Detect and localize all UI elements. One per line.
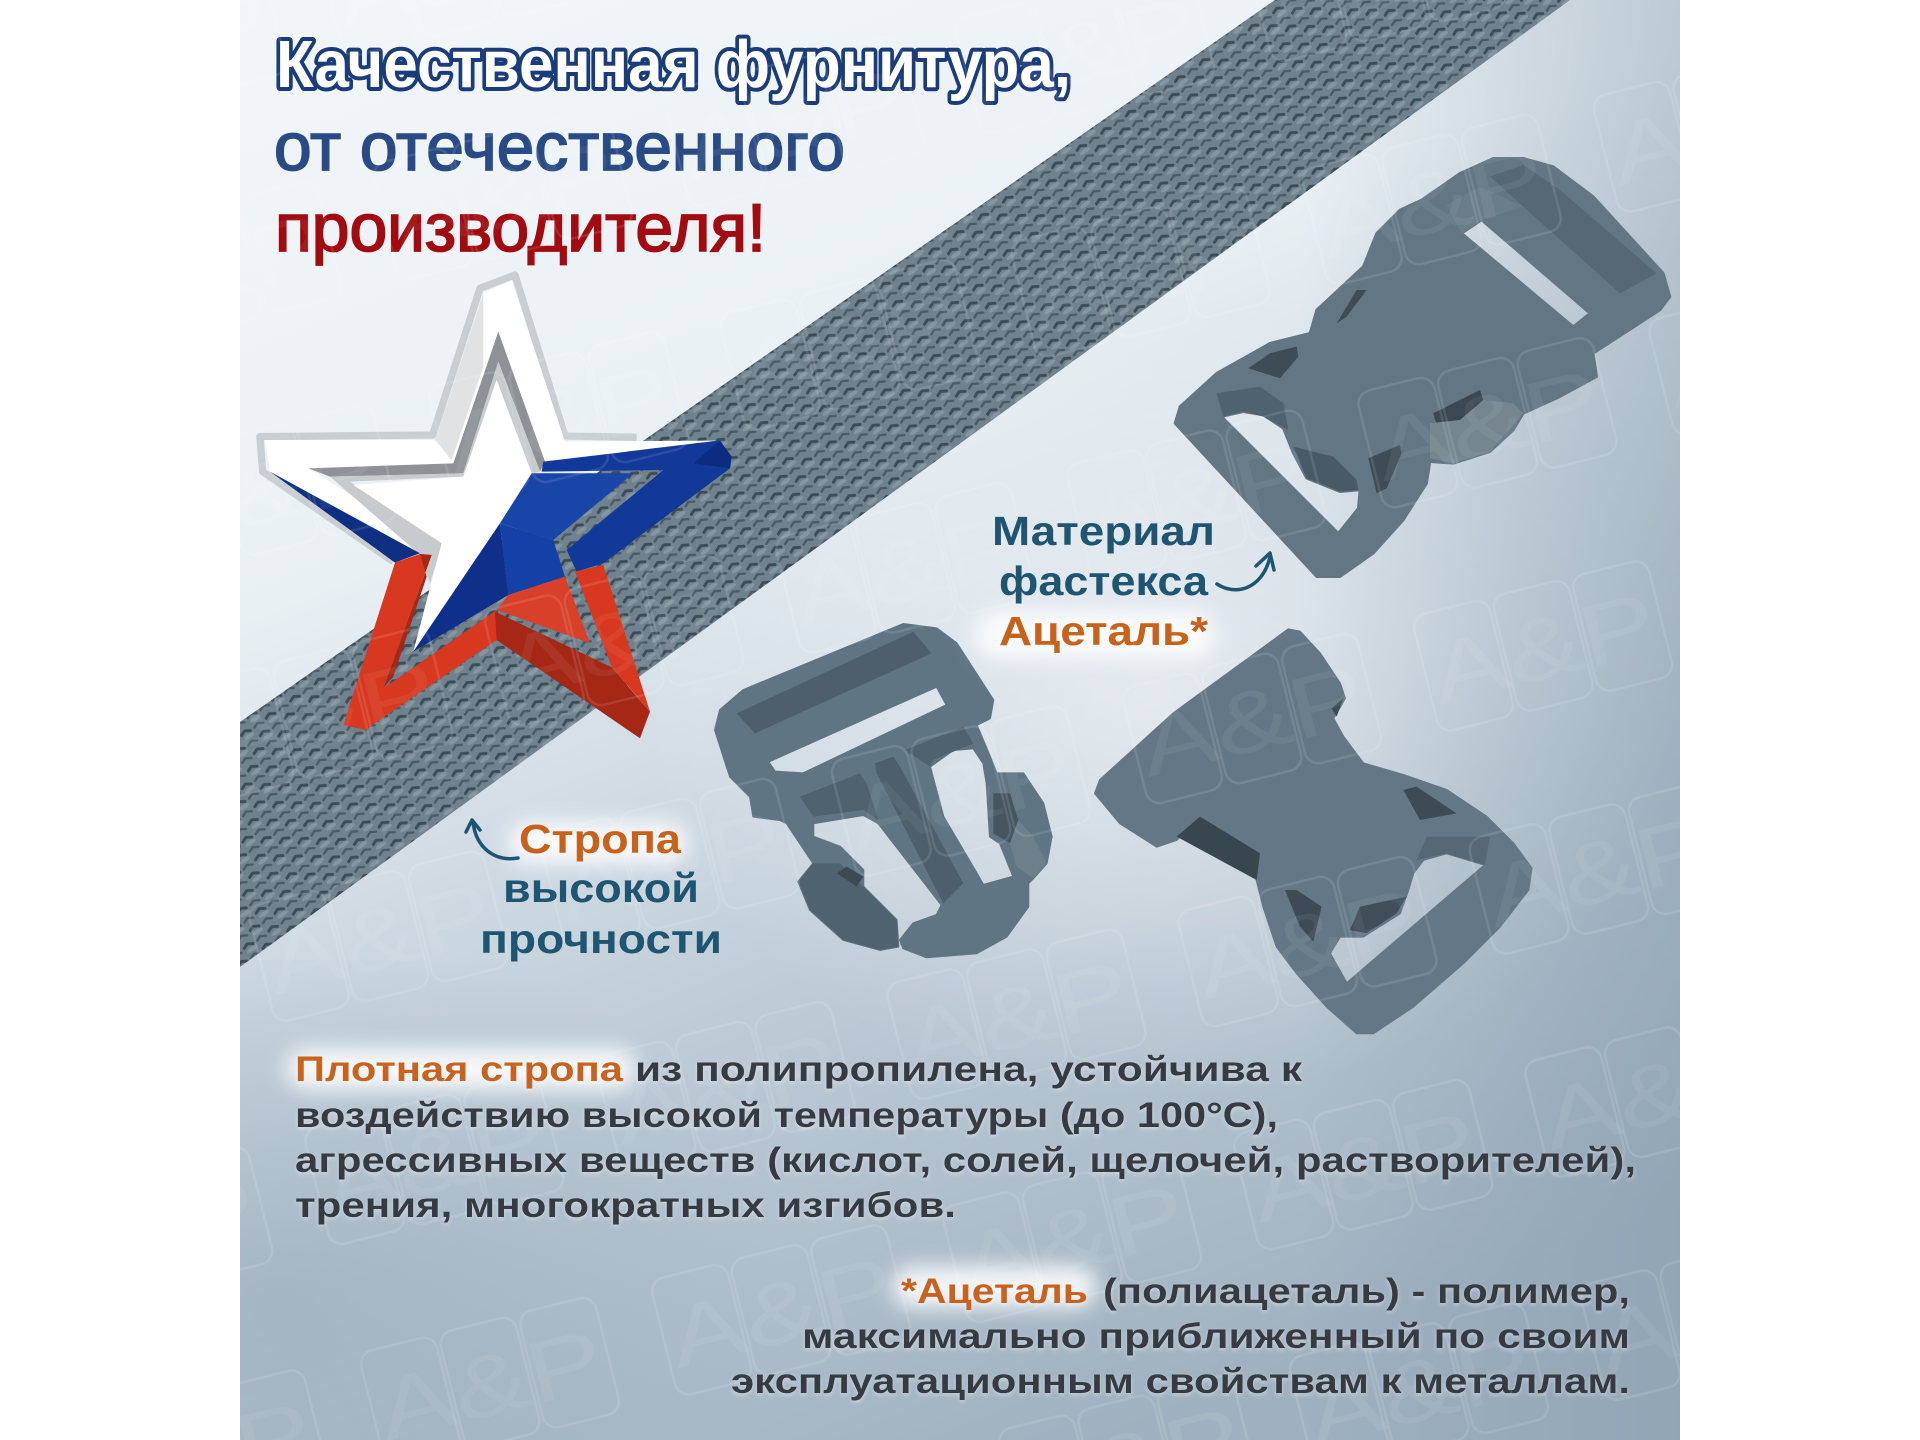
label line: high: высокой bbox=[503, 865, 699, 911]
arrow: to fastex bbox=[1217, 553, 1274, 590]
title line 2: от отечественного bbox=[274, 109, 845, 185]
label line: acetal: Ацеталь* bbox=[999, 608, 1208, 654]
icon: tricolour star bbox=[260, 275, 732, 738]
strap line 3: агрессивных веществ (кислот, солей, щелочей, растворителей), bbox=[295, 1141, 1636, 1180]
label: strap strength bbox=[480, 816, 722, 962]
strap line 1: из полипропилена, устойчива к bbox=[635, 1050, 1303, 1089]
footnote line 2: максимально приближенный по своим bbox=[802, 1317, 1630, 1356]
title bbox=[274, 27, 1071, 266]
background panel bbox=[240, 0, 1680, 1440]
label line: strength: прочности bbox=[480, 916, 722, 962]
strap line 4: трения, многократных изгибов. bbox=[295, 1186, 956, 1225]
footnote line 3: эксплуатационным свойствам к металлам. bbox=[731, 1362, 1630, 1401]
watermark layer bbox=[240, 0, 1680, 1440]
footnote line 1: (полиацеталь) - полимер, bbox=[1103, 1272, 1630, 1311]
strap line 2: воздействию высокой температуры (до 100°C), bbox=[295, 1096, 1278, 1135]
label line: material: Материал bbox=[992, 508, 1215, 554]
label line: strap: Стропа bbox=[519, 816, 682, 862]
label: fastex material bbox=[992, 508, 1215, 654]
acetal term: *Ацеталь bbox=[901, 1272, 1088, 1311]
highlight glows bbox=[286, 612, 1215, 1308]
text block: acetal footnote bbox=[731, 1272, 1630, 1401]
buckle: female part bbox=[1095, 629, 1532, 1033]
webbing strap bbox=[240, 0, 1570, 967]
title line 3: производителя! bbox=[275, 190, 766, 266]
strap phrase highlight: Плотная стропа bbox=[295, 1050, 624, 1089]
buckle: male part bbox=[715, 624, 1052, 957]
arrow: to strap bbox=[466, 820, 518, 859]
title line 1: Качественная фурнитура, bbox=[276, 27, 1071, 102]
text block: strap description bbox=[295, 1050, 1636, 1225]
label line: fastex: фастекса bbox=[999, 558, 1209, 604]
buckle: upper right assembled fastex bbox=[1175, 158, 1670, 577]
